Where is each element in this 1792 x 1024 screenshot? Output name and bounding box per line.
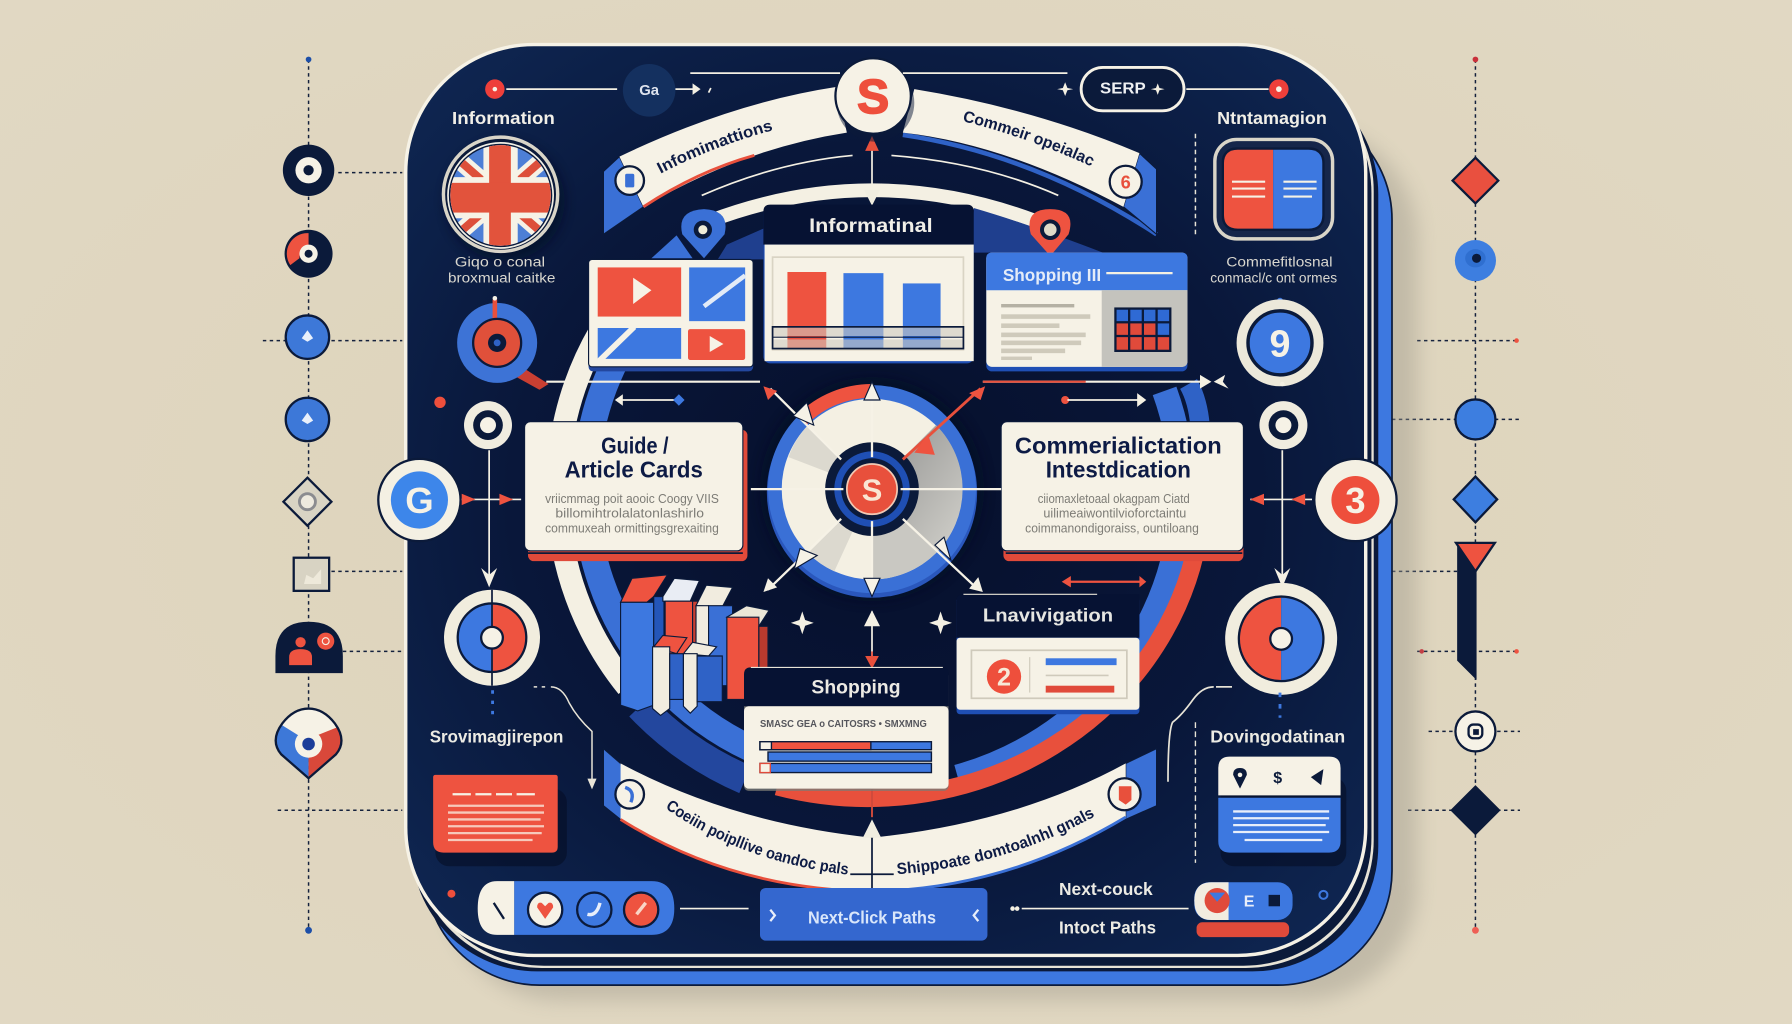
3 button: 3: [1345, 480, 1366, 521]
G button: G: [405, 480, 434, 521]
top S button: [835, 58, 914, 142]
ribbon body: [621, 763, 1126, 890]
center dial: S: [862, 473, 882, 508]
ribbon label right: Shippoate domtoalnhl gnals: [897, 810, 1094, 876]
heading: Article Cards: [565, 457, 703, 483]
icon: red diamond: [1453, 158, 1498, 203]
label: Shopping III: [1003, 265, 1101, 285]
text lines: [1001, 304, 1090, 360]
badge right: [1110, 166, 1142, 198]
map pin red: [1029, 209, 1070, 256]
red badge: [624, 893, 658, 927]
connector: dots under left dial: [491, 690, 494, 718]
icon: person dome: [275, 622, 343, 673]
body text: commuxeah ormittingsgrexaiting: [545, 522, 719, 536]
badge right: 6: [1121, 172, 1131, 193]
right top label: Ntntamagion: [1217, 108, 1327, 128]
top S button: S: [857, 71, 889, 124]
fold right: [1123, 153, 1157, 234]
ring: red lower right: [777, 526, 1200, 798]
fold left: [603, 749, 640, 819]
ribbon label right: Commeir opeialac: [964, 112, 1094, 166]
connector bottom right: [1010, 906, 1189, 911]
dashed divider: [1194, 134, 1196, 238]
ring: dark blue patch top: [718, 229, 763, 259]
flag caption: broxmual caitke: [448, 270, 556, 285]
SERP pill: [1081, 67, 1184, 111]
icon: blue diamond: [1454, 477, 1497, 522]
flag caption: Giqo o conal: [455, 254, 545, 269]
icon: blue disc one: [286, 315, 329, 359]
heading: Intestdication: [1046, 457, 1191, 483]
next-click paths button: [760, 888, 987, 941]
donut node left: [464, 401, 512, 449]
device icon right: [1215, 139, 1333, 239]
heart badge: [528, 893, 562, 927]
meta row: SMASC GEA o CAITOSRS • SMXMNG: [760, 719, 927, 730]
red dot bottom: [447, 890, 455, 898]
small red dot: [434, 397, 446, 408]
body text: [545, 492, 719, 536]
connector: [850, 789, 894, 891]
label: Shopping: [811, 677, 901, 699]
ribbon right: [903, 89, 1139, 207]
heading: Commerialictation: [1015, 433, 1222, 459]
SERP pill: SERP: [1100, 81, 1146, 98]
bottom right toggle: E: [1244, 893, 1255, 910]
body text: ciiomaxletoaal okagpam Ciatd: [1038, 492, 1190, 506]
star right: [929, 611, 952, 634]
donut node right: [1259, 401, 1307, 449]
icon: square tile: [294, 558, 329, 591]
bottom right toggle: [1194, 882, 1293, 937]
ring: outer blue strip: [1189, 384, 1200, 425]
badge right: [1109, 778, 1141, 810]
arrows: 3 to card: [1250, 494, 1312, 505]
ribbon label left: Coeiin poipllive oandoc pals: [667, 800, 848, 874]
arrow: left vertical: [481, 450, 497, 587]
connector curve right: [1168, 687, 1232, 782]
horizontal connector lines: [546, 375, 1229, 389]
icon: lock circle: [1455, 711, 1495, 751]
right lower label: Dovingodatinan: [1210, 726, 1345, 746]
panel: back layers: [411, 63, 1392, 985]
video card: [589, 259, 753, 371]
arrow: right vertical: [1274, 450, 1290, 587]
diagram rings: [558, 190, 1200, 798]
Ga node: Ga: [639, 83, 660, 99]
target icon left: [457, 296, 549, 390]
panel shadow: [446, 126, 1417, 1000]
informational card: [763, 205, 974, 363]
ribbon label left: Infomimattions: [656, 122, 772, 174]
device caption: [1210, 254, 1337, 285]
books chart: [621, 575, 769, 715]
result row: 2: [997, 664, 1011, 692]
gray wedges: [872, 425, 963, 553]
dashed vertical right: [1194, 722, 1196, 863]
panel: main navy board: [406, 45, 1366, 955]
ribbon left: [619, 87, 847, 207]
left top label: Information: [452, 108, 555, 128]
product grid: [1114, 307, 1171, 352]
shopping card: [744, 667, 949, 791]
result row: [971, 650, 1127, 698]
thin arcs under ribbon: [702, 155, 1058, 195]
guide article card: [525, 422, 747, 561]
blue dot bottom: [1319, 891, 1327, 899]
bar chart: [773, 257, 963, 350]
icon: location pin tricolor: [276, 709, 341, 778]
icon: target half red: [285, 230, 333, 278]
hub: [825, 442, 919, 536]
label: Lnavivigation: [983, 605, 1113, 626]
badge left: [615, 780, 644, 809]
spokes: [751, 389, 1001, 594]
top status row: [485, 64, 1289, 117]
dial right: [1225, 583, 1337, 695]
arrow: center down to shopping: [864, 610, 880, 669]
connector: dots under right dial: [1279, 693, 1281, 718]
icon: target navy: [283, 145, 334, 196]
bottom ribbon: [604, 750, 1156, 888]
Ga node: [623, 64, 675, 117]
ring: cream top arc: [711, 190, 1034, 221]
device caption: Commefitlosnal: [1226, 254, 1333, 269]
commercial investigation card: [1001, 422, 1243, 561]
body text: vriicmmag poit aooic Coogy VIIS: [545, 492, 719, 506]
next-click paths button: Next-Click Paths: [808, 907, 936, 927]
star: [1057, 82, 1073, 96]
stacked bars: [760, 742, 931, 773]
heading: [565, 433, 703, 483]
ring: blue patch under top-left pin: [651, 235, 693, 258]
bottom right label one: Next-couck: [1059, 879, 1153, 899]
icon: flag bar with red triangle: [1456, 543, 1495, 680]
icon: navy diamond: [1450, 785, 1501, 835]
bottom right label two: Intoct Paths: [1059, 917, 1156, 937]
navigation card: [957, 594, 1139, 714]
left sidebar: icon rail: [263, 57, 402, 934]
shopping results card: [986, 253, 1187, 371]
icon: grey diamond: [283, 478, 331, 526]
center dial: [751, 377, 1001, 601]
small red arrow: [1062, 576, 1146, 587]
small arrow left: [615, 394, 685, 406]
ring: cream left: [558, 331, 627, 687]
body text: billomihtrolalatonlashirlo: [555, 507, 704, 521]
red note card: [433, 775, 567, 866]
heading: [1015, 433, 1222, 483]
flag caption: [448, 254, 556, 285]
dial left: [444, 590, 540, 686]
blue note card: [1218, 757, 1346, 866]
number 9 button: 9: [1270, 323, 1290, 365]
ring: blue lower right: [958, 391, 1182, 777]
fold right: [1126, 749, 1157, 819]
red arc: [802, 391, 872, 419]
fold left: [603, 157, 643, 234]
left lower label: Srovimagjirepon: [430, 726, 563, 746]
icon: blue disc with hole: [1455, 240, 1496, 281]
flag medallion: [443, 137, 565, 261]
3 button: [1314, 459, 1397, 541]
body text: [1025, 492, 1199, 536]
right sidebar: icon rail: [1392, 57, 1520, 934]
arrowheads: [793, 382, 951, 597]
ring: dark blue lower left: [640, 706, 745, 779]
number 9 button: [1237, 298, 1323, 386]
device caption: conmacl/c ont ormes: [1210, 270, 1337, 285]
connector curve left: [534, 687, 595, 787]
top ribbon: [604, 87, 1158, 236]
icon: blue disc two: [286, 398, 329, 441]
label: Informatinal: [809, 215, 933, 237]
arrow right: [675, 83, 711, 95]
ring: dark blue patch top right: [974, 208, 1103, 253]
star left: [791, 611, 814, 634]
badge left: [615, 166, 644, 195]
red node right: [1269, 79, 1289, 99]
body text: coimmanondigoraiss, ountiloang: [1025, 522, 1199, 536]
arrows: G to card: [462, 494, 521, 505]
map pin blue: [681, 209, 726, 258]
small arrow right: [1061, 393, 1146, 407]
swirl badge: [577, 893, 611, 927]
G button: [378, 459, 461, 541]
tool icons: $: [1273, 770, 1282, 787]
arrow: top vertical: [864, 136, 880, 206]
heading: Guide /: [601, 433, 669, 459]
icon: blue circle: [1455, 399, 1495, 439]
body text: uilimeaiwontilvioforctaintu: [1043, 507, 1186, 521]
ring: blue left: [585, 358, 751, 749]
red node left: [485, 79, 505, 99]
bottom left pill: [478, 881, 674, 935]
